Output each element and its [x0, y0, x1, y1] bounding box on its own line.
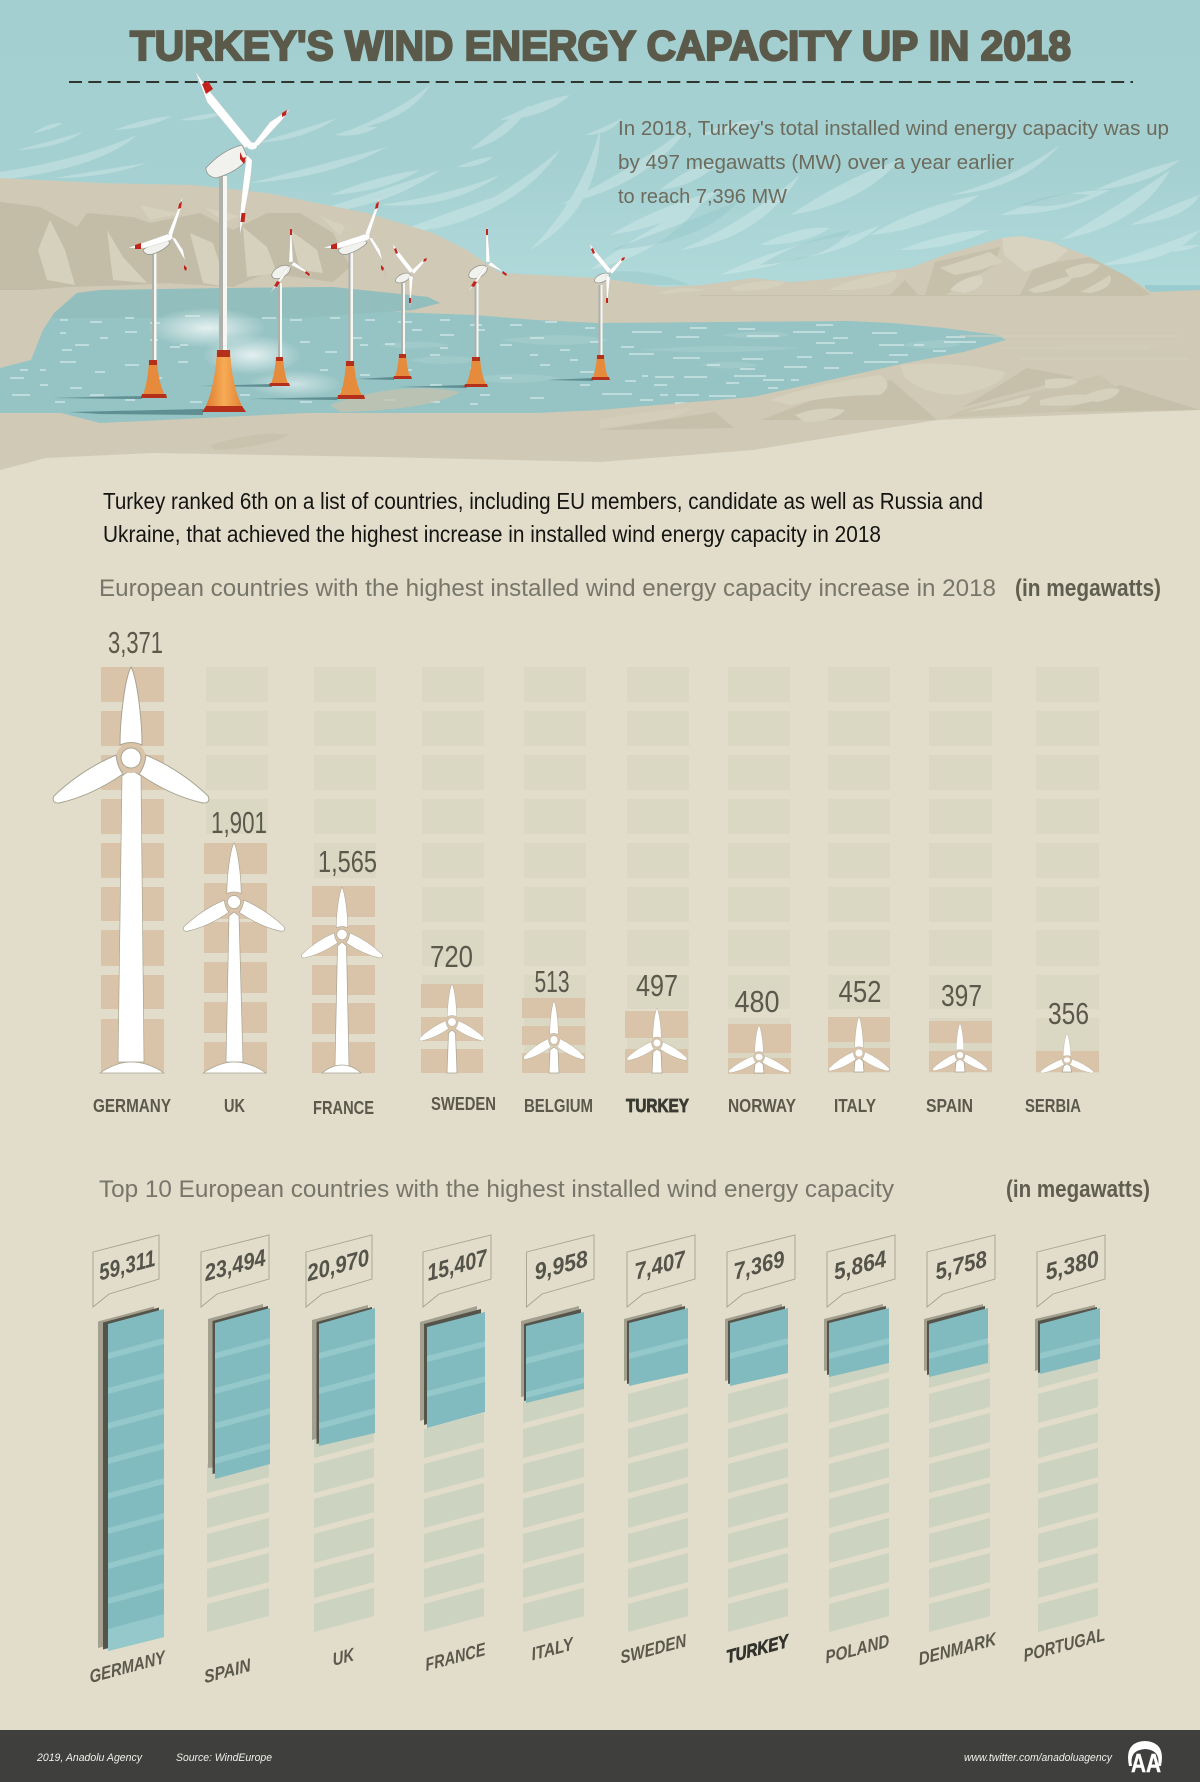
chart 1 heading: European countries with the highest installed wind energy capacity increase in 2018	[99, 575, 996, 602]
intro paragraph	[618, 118, 1169, 208]
France bar	[420, 1235, 491, 1675]
cliff light fingers	[38, 205, 345, 287]
Sweden bar: 7,407	[633, 1245, 688, 1285]
chart 1 empty background blocks	[206, 667, 1099, 1073]
Turkey bar: TURKEY	[725, 1630, 791, 1667]
Germany column: GERMANY	[93, 1096, 171, 1116]
Spain bar: 23,494	[202, 1244, 267, 1286]
UK bar: UK	[331, 1644, 357, 1670]
France bar: 15,407	[425, 1244, 490, 1286]
intro paragraph: by 497 megawatts (MW) over a year earlier	[618, 152, 1014, 174]
intro paragraph: to reach 7,396 MW	[618, 186, 787, 208]
Denmark bar: DENMARK	[917, 1628, 999, 1669]
ranking statement: Ukraine, that achieved the highest increase in installed wind energy capacity in 2018	[103, 521, 881, 547]
Denmark bar	[917, 1235, 999, 1669]
chart 2: top 10 installed capacity	[88, 1235, 1106, 1687]
turbine 3	[323, 195, 386, 399]
Italy bar: ITALY	[530, 1633, 576, 1665]
Spain column: 397	[941, 978, 982, 1013]
sky	[0, 0, 1200, 300]
UK column	[183, 805, 285, 1116]
chart 1: wind capacity increase	[53, 625, 1099, 1118]
footer source: Source: WindEurope	[176, 1752, 272, 1764]
Portugal bar: PORTUGAL	[1022, 1624, 1106, 1666]
sky cloud streaks	[0, 85, 1200, 275]
Belgium column: 513	[534, 964, 570, 999]
big turbine	[195, 71, 290, 412]
right mountain shading	[660, 236, 1151, 296]
Poland bar: 5,864	[832, 1245, 888, 1285]
Serbia column: SERBIA	[1025, 1096, 1081, 1116]
Denmark bar: 5,758	[934, 1245, 988, 1285]
distant teal horizon	[1145, 285, 1200, 295]
Italy bar: 9,958	[533, 1245, 589, 1285]
Italy column: 452	[838, 974, 882, 1009]
Italy bar	[521, 1235, 594, 1665]
Belgium column	[522, 964, 593, 1116]
footer bar	[0, 1730, 1200, 1782]
cliff dark ridges	[0, 202, 350, 290]
water sparkles	[10, 316, 976, 404]
Sweden column: SWEDEN	[431, 1094, 496, 1114]
Italy column: ITALY	[834, 1096, 876, 1116]
UK column: UK	[224, 1096, 245, 1116]
Poland bar: POLAND	[824, 1631, 890, 1668]
turbine 1	[128, 195, 189, 398]
Poland bar	[824, 1235, 895, 1668]
France column: FRANCE	[313, 1098, 374, 1118]
Turkey column: TURKEY	[626, 1096, 689, 1116]
Spain bar: SPAIN	[203, 1655, 252, 1687]
Spain column: SPAIN	[926, 1096, 973, 1116]
Turkey bar: 7,369	[732, 1245, 786, 1285]
UK column: 1,901	[211, 805, 267, 840]
Sweden bar	[619, 1235, 695, 1668]
turbine 5	[464, 223, 510, 387]
Norway column	[728, 984, 796, 1116]
chart 2 heading: Top 10 European countries with the highest installed wind energy capacity	[99, 1176, 894, 1203]
Germany bar	[88, 1235, 168, 1687]
chart 1 heading: (in megawatts)	[1015, 575, 1161, 602]
front sand	[0, 410, 1200, 490]
illustration: offshore wind landscape	[0, 0, 1200, 490]
intro paragraph: In 2018, Turkey's total installed wind energy capacity was up	[618, 118, 1169, 140]
darker sky patches	[610, 194, 1090, 285]
Germany bar: 59,311	[97, 1245, 157, 1285]
cliff and ground	[0, 178, 1200, 480]
bank rocks	[210, 335, 1200, 462]
Germany column	[53, 625, 209, 1116]
Turkey bar	[725, 1235, 795, 1667]
ranking statement: Turkey ranked 6th on a list of countries, including EU members, candidate as well as Russia and	[103, 488, 983, 514]
water light patches	[380, 332, 960, 383]
Belgium column: BELGIUM	[524, 1096, 593, 1116]
UK bar: 20,970	[305, 1244, 371, 1287]
icon: Anadolu Agency logo: AA	[1131, 1748, 1161, 1778]
title: TURKEY'S WIND ENERGY CAPACITY UP IN 2018	[130, 22, 1071, 69]
Norway column: 480	[734, 984, 780, 1019]
France bar: FRANCE	[424, 1639, 487, 1675]
turbine 6	[589, 243, 626, 380]
icon: Anadolu Agency logo	[1128, 1741, 1162, 1778]
water	[0, 287, 1006, 423]
Spain bar	[201, 1235, 270, 1687]
Spain column	[926, 978, 992, 1116]
Portugal bar: 5,380	[1044, 1245, 1100, 1285]
UK bar	[305, 1235, 375, 1670]
ranking statement	[103, 488, 983, 547]
water glows	[147, 308, 267, 348]
Turkey column	[625, 968, 689, 1116]
footer twitter link: www.twitter.com/anadoluagency	[964, 1752, 1113, 1764]
Norway column: NORWAY	[728, 1096, 796, 1116]
Sweden column: 720	[430, 939, 473, 974]
footer credit: 2019, Anadolu Agency	[36, 1752, 143, 1764]
Italy column	[828, 974, 890, 1116]
Germany bar: GERMANY	[88, 1647, 168, 1687]
chart 2 heading: (in megawatts)	[1006, 1176, 1150, 1203]
Serbia column	[1025, 996, 1099, 1116]
turbine 4	[392, 243, 428, 379]
turbine 2	[269, 223, 313, 386]
Turkey column: 497	[636, 968, 678, 1003]
France column: 1,565	[318, 844, 377, 879]
Sweden column	[419, 939, 496, 1114]
Serbia column: 356	[1048, 996, 1089, 1031]
Sweden bar: SWEDEN	[619, 1630, 688, 1668]
France column	[302, 844, 382, 1118]
Portugal bar	[1022, 1235, 1106, 1666]
Germany column: 3,371	[108, 625, 163, 660]
turbine shadows on water	[52, 377, 593, 415]
